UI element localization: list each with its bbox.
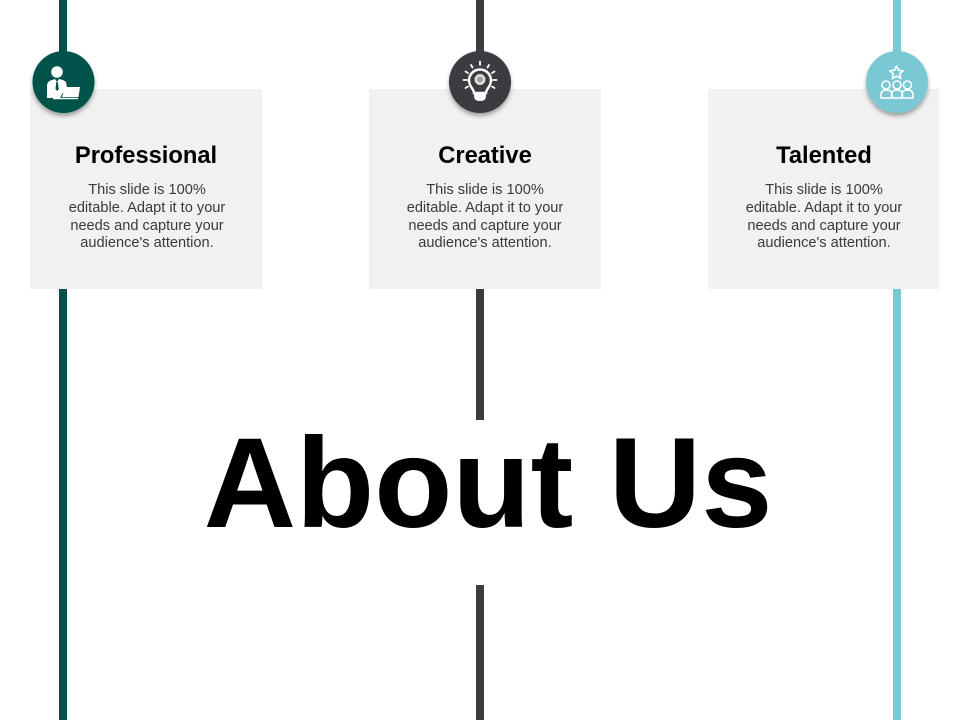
text: talented: editable. Adapt it to your bbox=[746, 200, 902, 216]
centre vertical line bbox=[476, 0, 484, 720]
icon: professional at laptop bbox=[32, 51, 94, 113]
text: professional: needs and capture your bbox=[70, 218, 224, 234]
text: talented: This slide is 100% bbox=[765, 182, 883, 198]
panel: talented bbox=[708, 89, 939, 289]
text: creative: This slide is 100% bbox=[426, 182, 544, 198]
text: professional: audience's attention. bbox=[80, 235, 214, 251]
title: About Us bbox=[204, 412, 772, 555]
text: talented: audience's attention. bbox=[757, 235, 891, 251]
text: creative: needs and capture your bbox=[408, 218, 562, 234]
icon: light bulb bbox=[449, 51, 511, 113]
panel: professional bbox=[30, 89, 262, 289]
right vertical line bbox=[893, 0, 901, 720]
text: creative: audience's attention. bbox=[418, 235, 552, 251]
text: professional: This slide is 100% bbox=[88, 182, 206, 198]
title backdrop bbox=[420, 420, 540, 585]
text: talented bbox=[746, 182, 902, 251]
heading: creative: Creative bbox=[438, 143, 532, 169]
heading: talented: Talented bbox=[776, 143, 872, 169]
text: professional: editable. Adapt it to your bbox=[69, 200, 225, 216]
left vertical line bbox=[59, 0, 67, 720]
panel: creative bbox=[369, 89, 601, 289]
icon: team with star bbox=[866, 51, 928, 113]
text: creative: editable. Adapt it to your bbox=[407, 200, 563, 216]
text: creative bbox=[407, 182, 563, 251]
text: professional bbox=[69, 182, 225, 251]
text: talented: needs and capture your bbox=[747, 218, 901, 234]
heading: professional: Professional bbox=[75, 143, 217, 169]
